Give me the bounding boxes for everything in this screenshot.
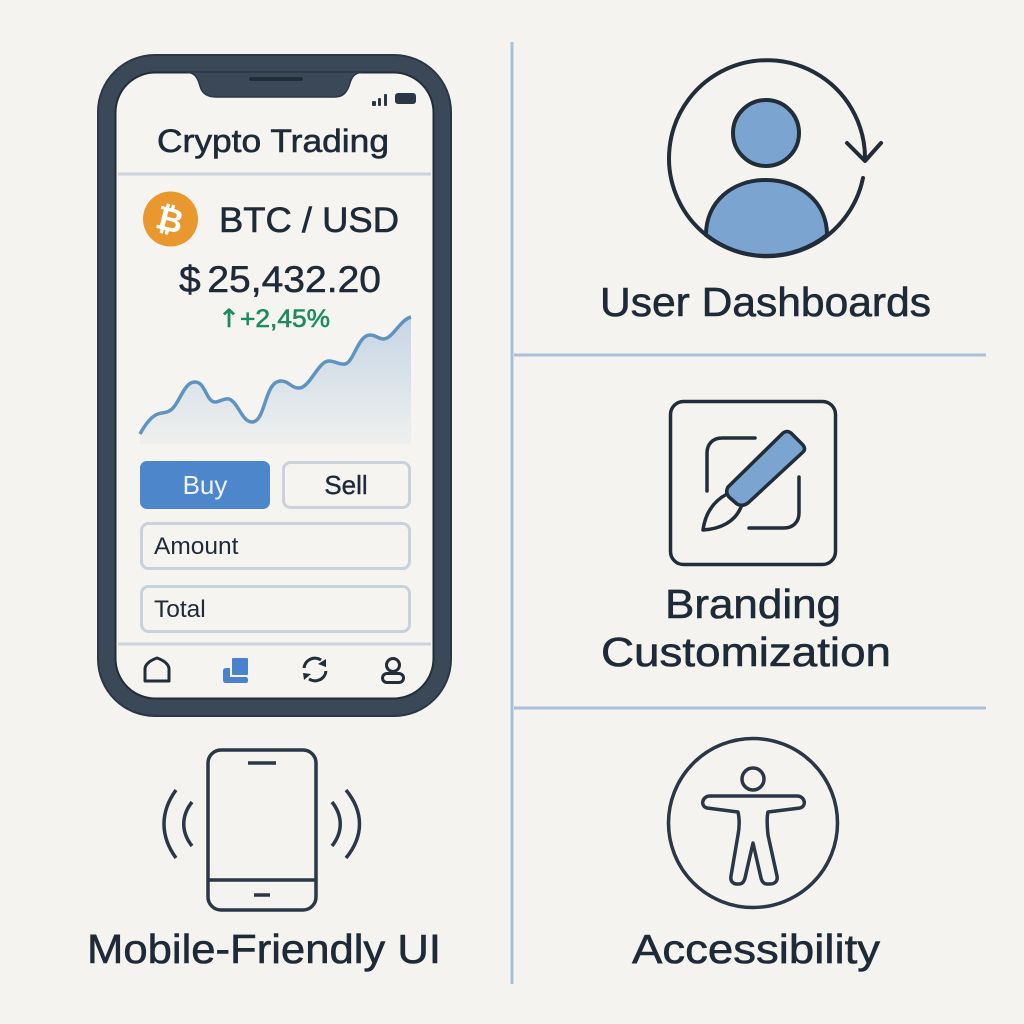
label: Accessibility bbox=[632, 926, 881, 972]
nav: swap bbox=[303, 658, 326, 681]
icon: bitcoin: ₿ bbox=[152, 198, 187, 241]
amount field: Amount bbox=[154, 533, 239, 560]
label: User Dashboards bbox=[600, 279, 931, 325]
amount field bbox=[142, 524, 410, 568]
nav: markets bbox=[223, 658, 248, 683]
icon: user with refresh circle bbox=[669, 60, 881, 256]
price chart bbox=[140, 317, 411, 444]
nav: profile bbox=[382, 658, 404, 682]
pair label: BTC / USD bbox=[219, 200, 399, 240]
sell button bbox=[284, 462, 410, 508]
phone mockup bbox=[97, 54, 452, 717]
icon: accessibility figure bbox=[668, 738, 838, 908]
price: $ 25,432.20 bbox=[179, 259, 381, 300]
feature: accessibility bbox=[632, 738, 881, 972]
buy button: Buy bbox=[183, 470, 227, 500]
phone notch bbox=[186, 72, 363, 97]
total field: Total bbox=[154, 596, 206, 623]
label: Customization bbox=[601, 629, 891, 675]
sell button: Sell bbox=[324, 470, 368, 500]
phone body bbox=[97, 54, 452, 717]
nav: home bbox=[145, 658, 169, 681]
total field bbox=[142, 586, 410, 632]
buy button bbox=[140, 461, 270, 509]
icon: bitcoin bbox=[143, 192, 198, 246]
feature: mobile-friendly UI bbox=[87, 750, 441, 972]
feature: branding customization bbox=[601, 402, 891, 675]
status icons bbox=[372, 93, 416, 106]
app title: Crypto Trading bbox=[157, 123, 389, 159]
icon: pen in frame bbox=[670, 402, 836, 564]
icon: mobile device bbox=[164, 750, 360, 910]
feature: user dashboards bbox=[600, 60, 931, 325]
label: Branding bbox=[665, 581, 841, 627]
label: Mobile-Friendly UI bbox=[87, 926, 441, 972]
price change: ↑+2,45% bbox=[218, 304, 330, 333]
label bbox=[601, 581, 891, 675]
